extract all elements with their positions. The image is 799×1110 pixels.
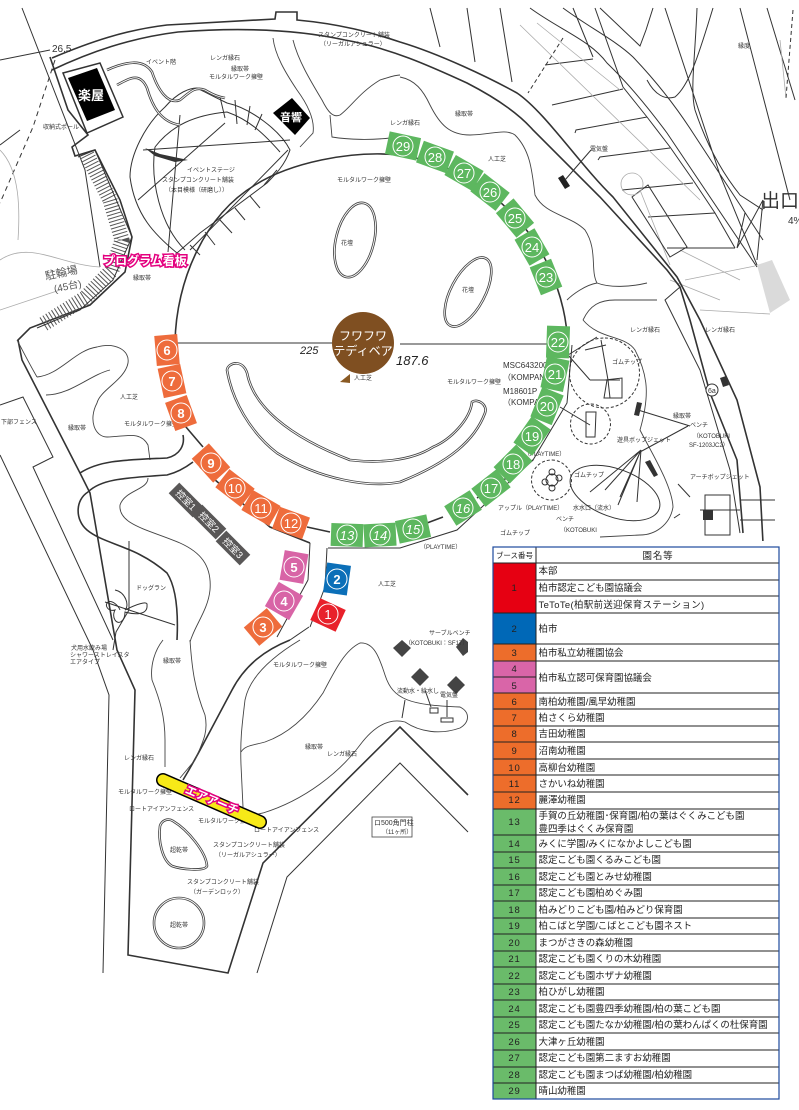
map labels: small plan annotations: ゴムチップ [574,471,604,479]
base map: stage area [107,63,290,255]
booth 27 [444,155,484,191]
table booth numbers: 22 [508,971,521,982]
attraction: fluffy teddy bear: テディベア [333,343,393,358]
map labels: small plan annotations: モルタルワーク擁壁 [198,817,252,825]
table kindergarten names: 麗澤幼稚園 [538,794,586,806]
map labels: small plan annotations: モルタルワーク擁壁 [209,73,263,81]
map labels: small plan annotations: （リーガルアシュラー） [215,851,281,859]
map labels: small plan annotations: アップル（PLAYTIME） [498,505,563,512]
map labels: small plan annotations: レンガ縁石 [327,750,357,758]
table kindergarten names: みくに学園/みくになかよしこども園 [538,838,692,850]
map labels: small plan annotations: エアタイプ [70,658,100,666]
map labels: small plan annotations: （本目模様（研磨し）） [165,186,228,194]
map labels: small plan annotations: （リーガルアシュラー） [320,40,386,48]
table booth numbers: 29 [508,1086,521,1097]
base map: playground right [532,320,775,537]
table kindergarten names: 認定こども園くりの木幼稚園 [538,953,661,965]
table header [496,550,673,562]
map labels: small plan annotations: レンガ縁石 [705,326,735,334]
map labels: small plan annotations: （PLAYTIME） [524,451,565,458]
map labels: small plan annotations: レンガ縁石 [124,754,154,762]
air arch: エアアーチ [183,783,240,818]
table booth numbers: 5 [511,681,518,692]
booth 24: 24 [525,240,539,255]
booth 16 [444,490,482,526]
control room 2: 控室2 [196,510,221,535]
base map: lawn edge curves top [273,38,657,320]
table booth numbers: 19 [508,921,521,932]
table booth numbers: 2 [511,624,518,635]
table kindergarten names: 柏みどりこども園/柏みどり保育園 [538,904,683,916]
booth 9: 9 [207,456,215,471]
table booth numbers: 27 [508,1053,521,1064]
table kindergarten names: 認定こども園とみせ幼稚園 [538,871,652,883]
table kindergarten names: 高柳台幼稚園 [538,762,595,774]
table kindergarten names: 本部 [538,565,558,577]
table header: 園名等 [643,550,673,562]
table booth numbers: 1 [511,583,518,594]
base map: flower bed arc [227,363,486,484]
table kindergarten names [538,565,768,1097]
table booth numbers: 4 [511,664,518,675]
table kindergarten names: 沼南幼稚園 [538,745,586,757]
map labels: small plan annotations: 収納式ポール [43,123,79,131]
table kindergarten names: 豊四季はぐくみ保育園 [538,823,633,835]
label: program board: プログラム看板 [103,253,187,268]
booth 2: 2 [333,572,341,587]
map labels: small plan annotations: レンガ縁石 [630,326,660,334]
map labels: small plan annotations: ロートアイアンフェンス [254,827,319,834]
table booth numbers: 15 [508,855,521,866]
map labels: small plan annotations: （KOTOBUKI [560,527,597,534]
table kindergarten names: TeToTe(柏駅前送迎保育ステーション) [538,599,705,611]
map labels: small plan annotations: （ガーデンロック） [190,888,244,896]
booth 24 [515,228,549,266]
booth 26 [470,173,510,211]
map labels: small plan annotations: 6a [708,388,716,395]
control room 1 [169,483,203,517]
control room 1: 控室1 [173,488,198,513]
table kindergarten names: 認定こども園まつば幼稚園/柏幼稚園 [538,1069,692,1081]
table kindergarten names: 吉田幼稚園 [538,728,586,740]
map labels: small plan annotations: スタンプコンクリート舗装 [318,31,390,39]
booth 15: 15 [406,522,421,537]
table booth numbers: 17 [508,888,521,899]
handwritten dimensions [299,345,429,368]
booth 1 [310,598,346,632]
map labels: small plan annotations: 超乾帯 [170,921,188,929]
map labels: small plan annotations: （KOTOBUKI：SF17） [405,640,468,647]
legend: plan scale box [372,817,414,837]
booth 23: 23 [539,270,553,285]
table kindergarten names: 柏さくら幼稚園 [538,712,605,724]
table kindergarten names: 晴山幼稚園 [538,1085,586,1097]
table booth numbers: 14 [508,839,521,850]
booth 22: 22 [551,335,565,350]
map labels: small plan annotations: 縁取帯 [163,657,181,665]
booth 5: 5 [290,560,298,575]
table booth numbers: 21 [508,954,521,965]
booth 14 [363,523,397,547]
booth 17: 17 [484,481,498,496]
table booth numbers: 26 [508,1037,521,1048]
booth 20: 20 [540,399,554,414]
table booth numbers: 3 [511,648,518,659]
map labels: small plan annotations: シャワーストレイスタ [70,651,130,659]
attraction: fluffy teddy bear [332,312,394,374]
booth 12: 12 [284,516,298,531]
table booth numbers: 20 [508,938,521,949]
booth 6: 6 [163,343,171,358]
table kindergarten names: 認定こども園豊四季幼稚園/柏の葉こども園 [538,1003,720,1015]
map labels: small plan annotations: ロートアイアンフェンス [129,806,194,813]
map labels: small plan annotations: レンガ縁石 [390,119,420,127]
booth 15 [395,514,431,544]
handwritten dimensions: 225 [299,345,319,357]
control room 3: 控室3 [220,536,245,561]
booth 21: 21 [548,367,562,382]
table booth numbers: 23 [508,987,521,998]
booth 12 [272,507,310,539]
label: parking [44,262,83,297]
map labels: small plan annotations: 縁取帯 [455,110,473,118]
booth 18: 18 [506,457,520,472]
booth 6 [154,334,180,366]
table booth numbers: 6 [511,697,518,708]
table booth numbers: 24 [508,1004,521,1015]
booth 11: 11 [254,501,268,516]
map labels: small plan annotations: 人工芝 [488,155,506,163]
table booth numbers: 25 [508,1020,521,1031]
table booth numbers: 12 [508,795,521,806]
map labels: small plan annotations: スタンプコンクリート舗装 [162,176,234,184]
booth 16: 16 [456,501,471,516]
map labels: small plan annotations: （KOTOBUKI [693,433,730,440]
map labels: small plan annotations: M18601P [503,387,537,396]
control room 2 [192,505,226,539]
table header: ブース番号 [496,550,534,560]
attraction: fluffy teddy bear: フワフワ [339,329,387,343]
building: sound booth [273,98,310,135]
map labels: small plan annotations: スタンプコンクリート舗装 [187,878,259,886]
base map: outer park road [52,12,763,543]
map labels: small plan annotations: ドッグラン [136,584,166,592]
base map: left boundary lines [0,8,468,973]
table kindergarten names: 柏こばと学園/こばとこども園ネスト [538,920,692,932]
map labels: small plan annotations: 花壇 [462,286,474,294]
label: parking: (45台) [53,277,83,295]
booth 28 [416,141,454,173]
booth 27: 27 [457,166,471,181]
map labels: small plan annotations: 縁取帯 [231,65,249,73]
label: parking: 駐輪場 [44,262,79,283]
base map: faint land parcels at top right [430,8,795,314]
table booth numbers: 7 [511,713,518,724]
table kindergarten names: 認定こども園柏めぐみ園 [538,887,643,899]
map labels: small plan annotations: スタンプコンクリート舗装 [213,841,285,849]
booth 19 [513,416,551,456]
table kindergarten names: 柏市 [538,623,557,635]
map labels: small plan annotations: 縁取帯 [673,412,691,420]
map labels: small plan annotations [1,31,750,929]
table kindergarten names: さかいね幼稚園 [538,778,605,790]
building: dressing room: 楽屋 [78,88,104,103]
map labels: small plan annotations: サーブルベンチ [429,629,471,637]
map labels: small plan annotations: ベンチ [690,422,708,429]
table kindergarten names: 大津ヶ丘幼稚園 [538,1036,605,1048]
map labels: small plan annotations: ベンチ [556,516,574,523]
map labels: small plan annotations: （PLAYTIME） [420,544,461,551]
booth 20 [530,387,564,425]
legend: plan scale box: ロ500角門柱 [374,818,414,827]
exit label cut off at page edge [761,190,799,227]
map labels: small plan annotations: ゴムチップ [612,358,642,366]
map labels: small plan annotations: 電気盤 [590,145,608,153]
map labels: small plan annotations: 26.5 [52,44,72,55]
booth 21 [540,356,570,392]
building: dressing room [63,63,123,133]
booth 28: 28 [428,150,442,165]
booth 14: 14 [373,528,387,543]
map labels: small plan annotations: レンガ縁石 [210,54,240,62]
table kindergarten names: 柏市私立幼稚園協会 [538,647,624,659]
table kindergarten names: まつがさきの森幼稚園 [538,937,633,949]
table kindergarten names: 柏市私立認可保育園協議会 [538,672,652,684]
booth 13 [331,523,363,547]
table booth numbers: 28 [508,1070,521,1081]
air arch [163,780,260,822]
table colour column [493,563,536,1099]
booth 17 [471,469,511,507]
table booth numbers: 9 [511,746,518,757]
map labels: small plan annotations: モルタルワーク擁壁 [447,378,501,386]
base map: central circle road [175,154,572,548]
table kindergarten names: 南柏幼稚園/風早幼稚園 [538,696,636,708]
base map: small benches [393,638,468,722]
map labels: small plan annotations: 縁度 [738,42,750,50]
map labels: small plan annotations: （KOMPAN） [503,373,553,382]
table booth numbers: 13 [508,817,521,828]
booth 18 [494,445,532,483]
map labels: small plan annotations: モルタルワーク擁壁 [124,420,178,428]
map labels: small plan annotations: MSC643200 [503,361,548,370]
map labels: small plan annotations: アーチボップジェット [690,473,750,481]
table kindergarten names: 柏ひがし幼稚園 [538,986,605,998]
map labels: small plan annotations: モルタルワーク擁壁 [118,788,172,796]
booth 3: 3 [259,620,267,635]
handwritten dimensions: 187.6 [396,353,429,368]
booth 25: 25 [508,211,522,226]
booth 1: 1 [324,607,332,622]
map labels: small plan annotations: SF-1203JC2） [689,442,729,449]
map labels: small plan annotations: 縁取帯 [305,743,323,751]
map labels: small plan annotations: モルタルワーク擁壁 [273,661,327,669]
building: sound booth: 音響 [280,110,302,124]
map labels: small plan annotations: 花壇 [341,239,353,247]
map labels: small plan annotations: イベント階 [146,58,176,66]
map labels: small plan annotations: ゴムチップ [500,529,530,537]
table kindergarten names: 認定こども園ホザナ幼稚園 [538,970,652,982]
map labels: small plan annotations: イベントステージ [187,167,235,174]
table booth numbers [508,583,521,1097]
booth 3 [244,608,282,646]
map labels: small plan annotations: 遊具ボップジェット [617,436,671,444]
booth 7: 7 [168,374,176,389]
table booth numbers: 18 [508,905,521,916]
table booth numbers: 8 [511,729,518,740]
table kindergarten names: 柏市認定こども園協議会 [538,582,643,594]
booth 11 [241,490,281,526]
panel: booth list table [470,541,799,1110]
table booth numbers: 11 [509,779,520,790]
table kindergarten names: 手賀の丘幼稚園･保育園/柏の葉はぐくみこども園 [538,810,744,822]
base map: oval flower beds [327,199,501,334]
booth 29 [385,131,421,161]
entrance marker triangle: 人工芝 [354,374,372,382]
map labels: small plan annotations: 水水口（流水） [573,504,615,512]
map labels: small plan annotations: 電気盤 [440,691,458,699]
table kindergarten names: 認定こども園くるみこども園 [538,855,661,866]
booth 9 [192,443,230,483]
map labels: small plan annotations: 縁取帯 [133,274,151,282]
booth 22 [546,326,570,358]
booth 8: 8 [177,406,185,421]
map labels: small plan annotations: （KOMPAN） [503,398,553,407]
booth 19: 19 [525,429,539,444]
map labels: small plan annotations: 人工芝 [378,580,396,588]
booth 2 [323,562,351,596]
map labels: small plan annotations: 犬用水飲み場 [71,644,107,652]
table kindergarten names: 認定こども園第二ますお幼稚園 [538,1052,671,1064]
booth 4 [265,582,303,620]
booth 4: 4 [280,594,288,609]
booth 5 [280,550,308,584]
table kindergarten names: 認定こども園たなか幼稚園/柏の葉わんぱくの杜保育園 [538,1019,768,1031]
booth 25 [496,198,534,238]
booth 10: 10 [228,481,242,496]
table booth numbers: 10 [508,763,521,774]
booth 8 [165,395,197,431]
map labels: small plan annotations: モルタルワーク擁壁 [337,176,391,184]
booth 10 [215,469,255,507]
entrance marker triangle [340,374,372,383]
table booth numbers: 16 [508,872,521,883]
map labels: small plan annotations: 超乾帯 [170,846,188,854]
legend: plan scale box: （11ヶ所） [382,828,412,836]
table grid [493,547,779,1099]
booth 29: 29 [396,139,410,154]
base map: south lawn paths [17,340,468,948]
base map: parking bicycle hatch [37,150,132,328]
booth 26: 26 [483,185,497,200]
map labels: small plan annotations: 流動水・給水し [397,687,439,695]
map labels: small plan annotations: 人工芝 [120,393,138,401]
map labels: small plan annotations: 下部フェンス [1,418,37,426]
booth 13: 13 [340,528,355,543]
booth 23 [530,259,562,295]
map labels: small plan annotations: 縁取帯 [68,424,86,432]
booth 7 [158,364,186,398]
control room 3 [216,531,250,565]
